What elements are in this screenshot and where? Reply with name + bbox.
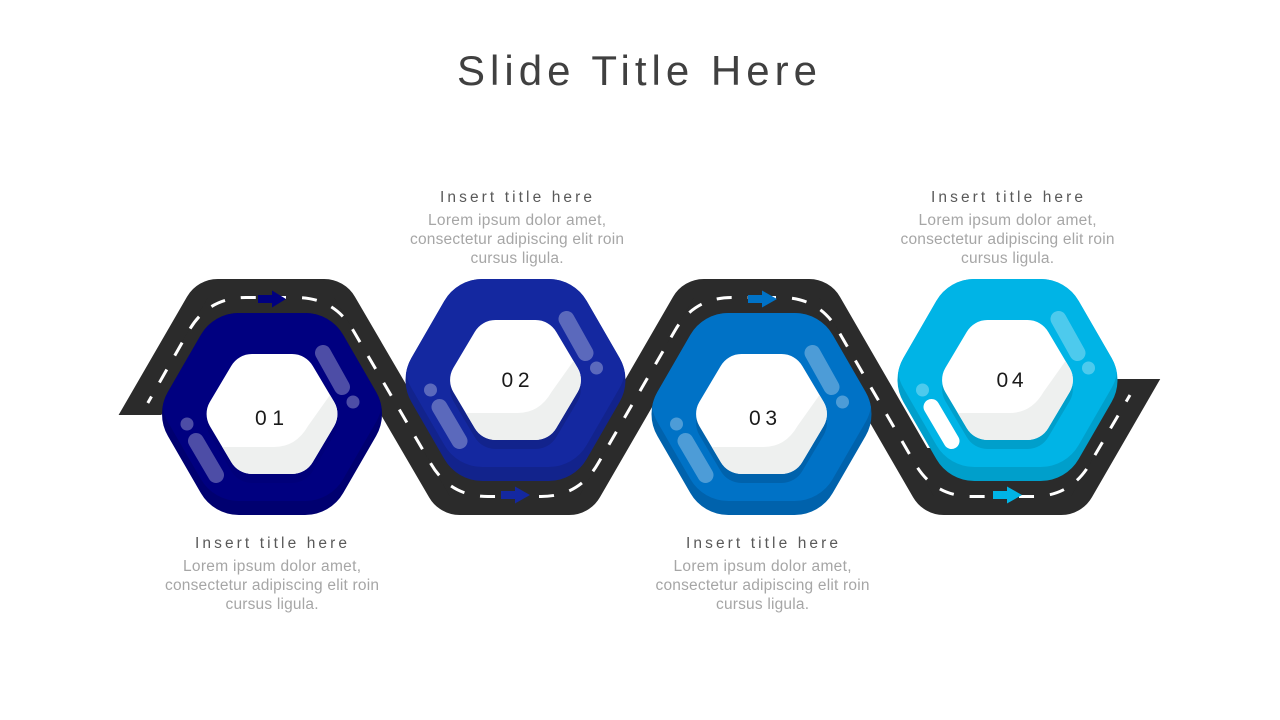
hexagon 04 xyxy=(898,279,1117,481)
arrow 4 xyxy=(993,486,1022,504)
road centre dashes xyxy=(148,298,1130,496)
heading 03: Insert title here xyxy=(686,535,838,552)
number 02: 02 xyxy=(502,369,530,392)
heading 02: Insert title here xyxy=(440,189,592,206)
winding road xyxy=(126,290,1151,504)
heading 01: Insert title here xyxy=(195,535,347,552)
text block 04 xyxy=(900,189,1114,267)
arrow 3 xyxy=(748,290,777,308)
body 02: consectetur adipiscing elit roin xyxy=(410,231,624,248)
body 04 xyxy=(900,212,1114,267)
body 02: cursus ligula. xyxy=(470,250,564,267)
heading 04: Insert title here xyxy=(931,189,1083,206)
body 01 xyxy=(165,558,379,613)
number 03: 03 xyxy=(749,407,777,430)
arrow 2 xyxy=(501,486,530,504)
body 01: consectetur adipiscing elit roin xyxy=(165,577,379,594)
number 01: 01 xyxy=(255,407,284,430)
hexagon 02 xyxy=(406,279,625,481)
arrow 1 xyxy=(258,290,286,308)
road surface xyxy=(126,297,1151,496)
body 03: consectetur adipiscing elit roin xyxy=(656,577,870,594)
title: Slide Title Here xyxy=(457,47,817,94)
body 01: cursus ligula. xyxy=(226,596,318,613)
text block 01 xyxy=(165,535,379,613)
body 02 xyxy=(410,212,624,267)
hexagon 03 xyxy=(652,313,871,515)
body 03 xyxy=(656,558,870,613)
number 04: 04 xyxy=(996,369,1024,392)
body 02: Lorem ipsum dolor amet, xyxy=(428,212,606,229)
body 03: Lorem ipsum dolor amet, xyxy=(674,558,852,575)
hexagon 01 xyxy=(162,313,382,515)
text block 02 xyxy=(410,189,624,267)
body 01: Lorem ipsum dolor amet, xyxy=(183,558,361,575)
body 03: cursus ligula. xyxy=(716,596,809,613)
body 04: Lorem ipsum dolor amet, xyxy=(918,212,1096,229)
text block 03 xyxy=(656,535,870,613)
body 04: consectetur adipiscing elit roin xyxy=(900,231,1114,248)
body 04: cursus ligula. xyxy=(961,250,1054,267)
